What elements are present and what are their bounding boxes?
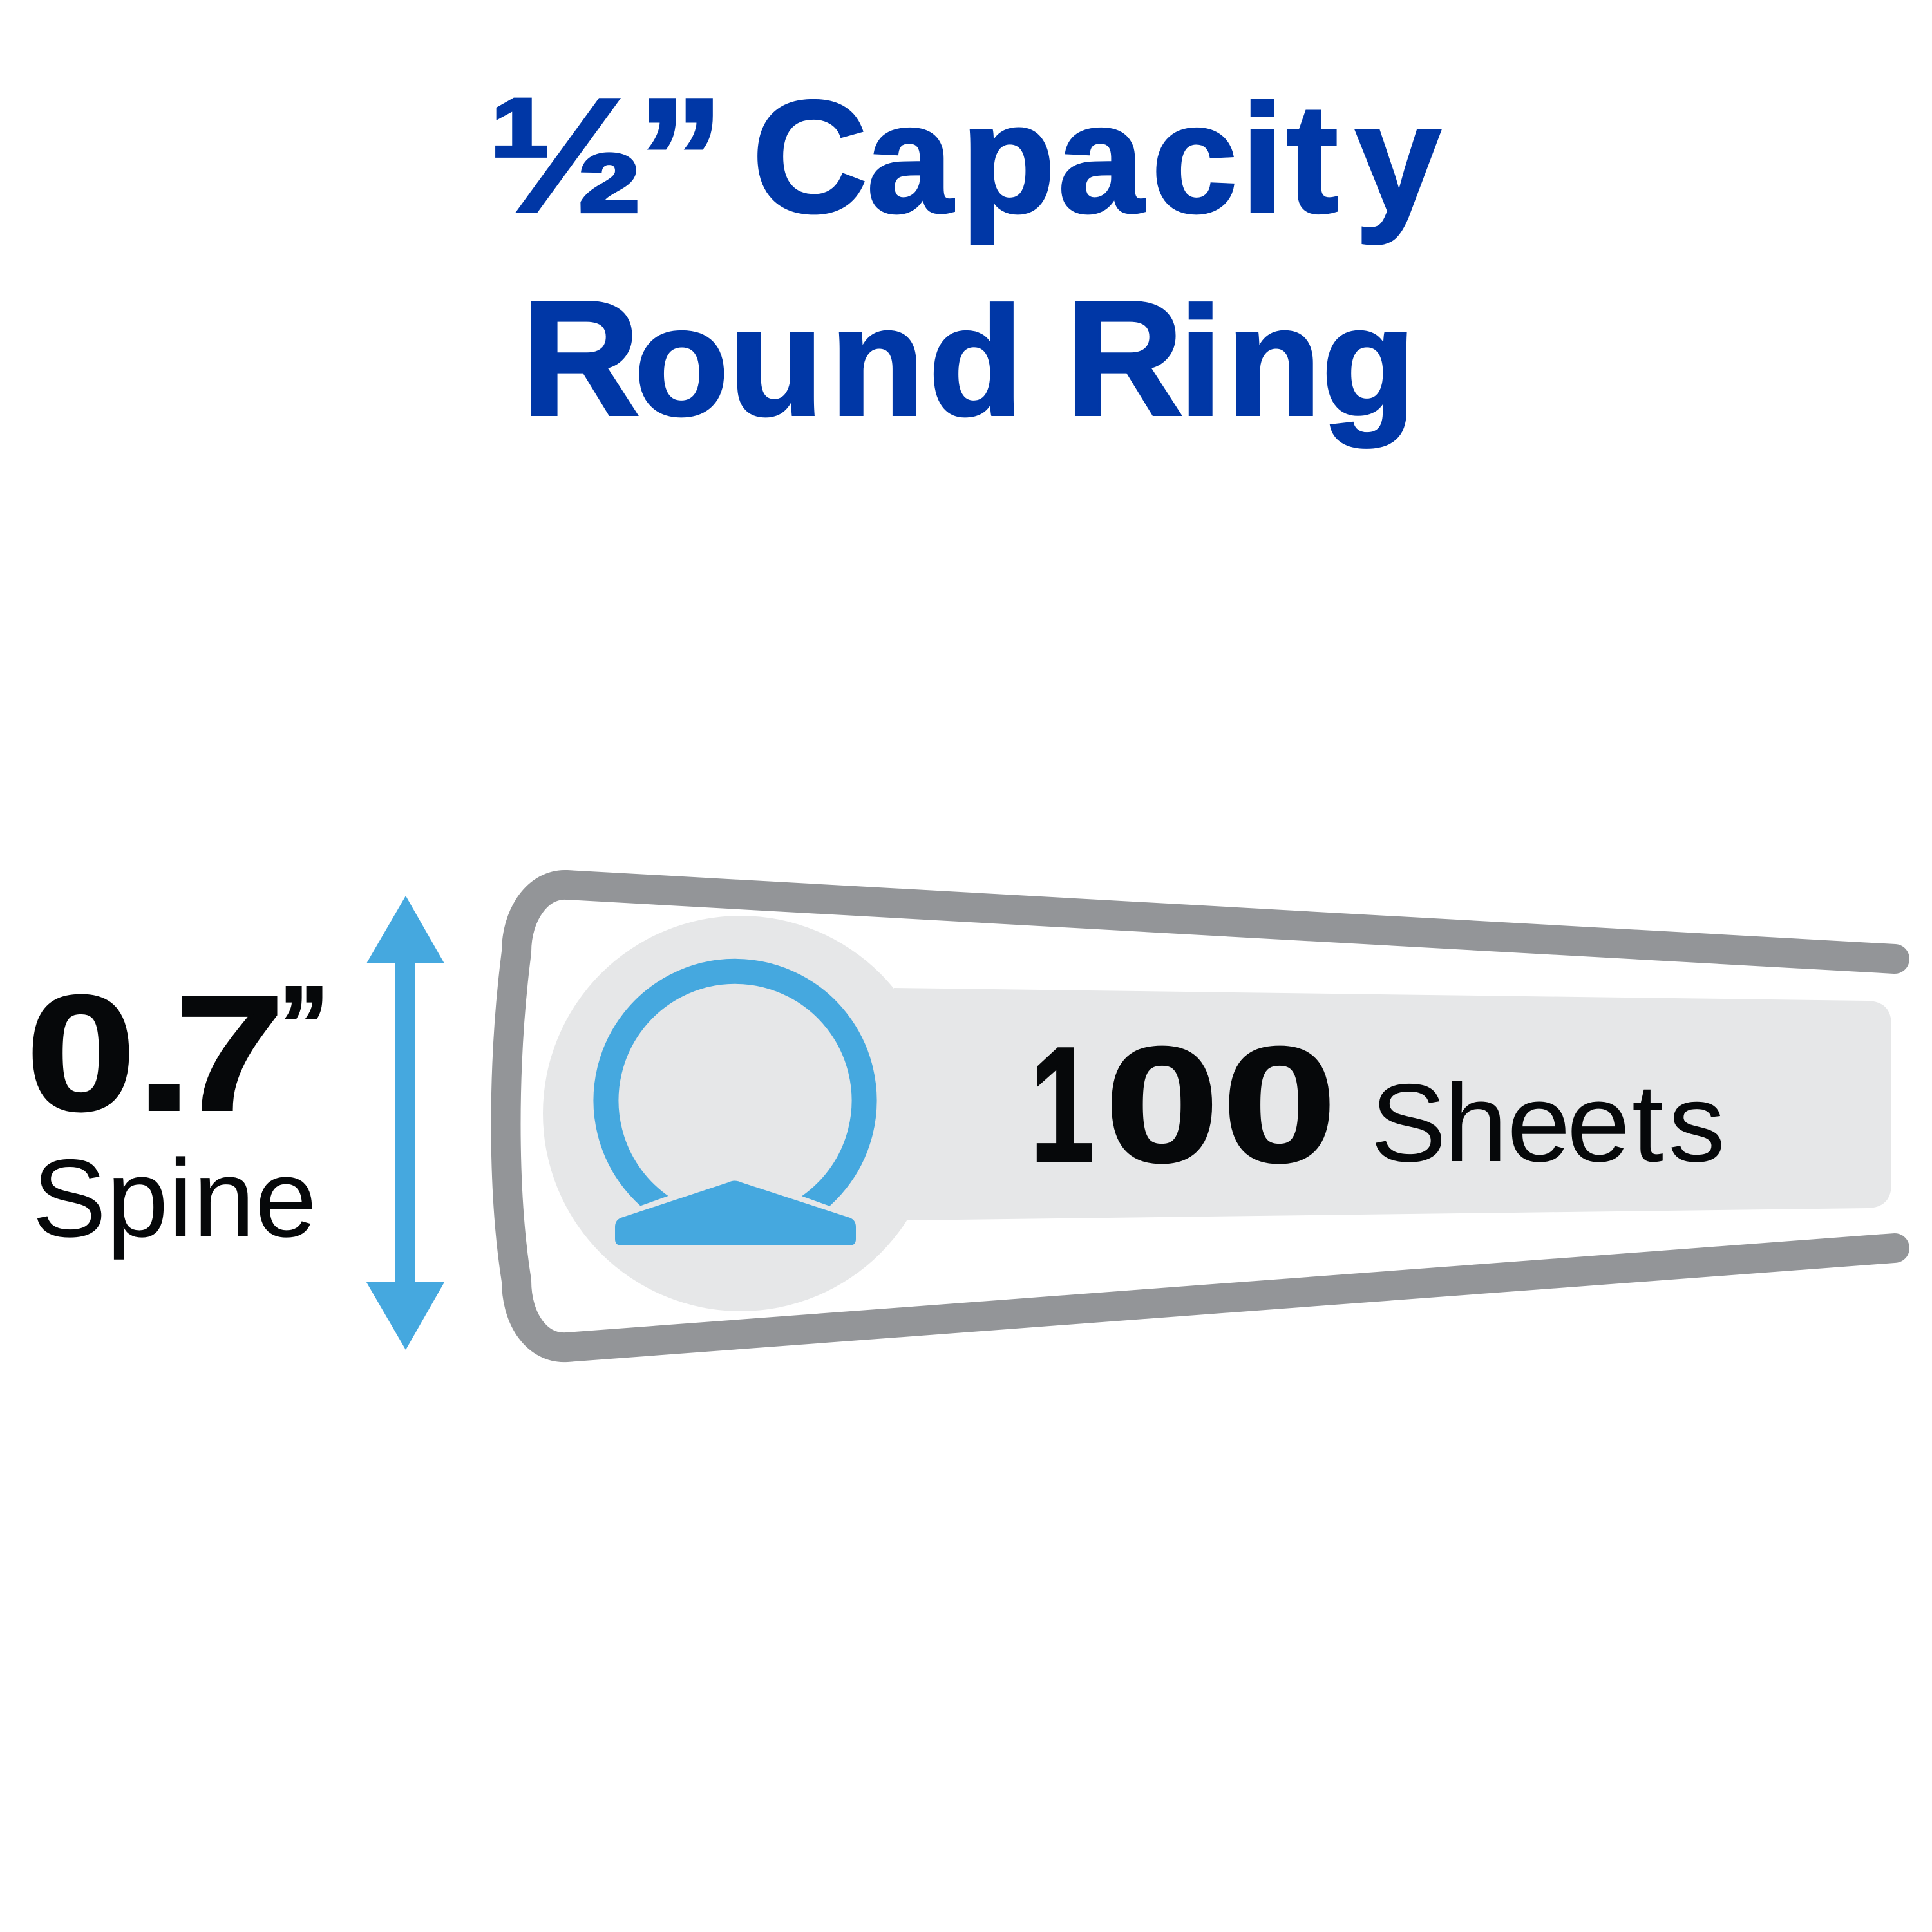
ring backdrop circle [543,916,938,1311]
sheet stack band [894,988,1891,1220]
title line 2: round ring: Round [522,267,1023,450]
sheet count caption: Sheets [1370,1061,1725,1184]
arrow: spine height [366,896,444,1350]
sheet count value: 1 [1030,1013,1094,1196]
title line 2: round ring: Ring [1065,267,1416,450]
sheet count value: 00 [1105,1013,1336,1196]
panel: sheet capacity [543,916,1891,1311]
title line 1: capacity [488,62,1441,256]
title line 2: round ring [522,267,1416,450]
spine value: 0.7 [26,962,285,1144]
icon: round ring [605,971,864,1249]
title [488,62,1441,450]
binder outline [506,885,1895,1347]
title line 1: capacity: Capacity [752,67,1441,246]
spine measurement label [26,962,328,1260]
title line 1: capacity: ” [637,62,724,256]
spine value: ” [279,964,328,1086]
spine caption: Spine [32,1137,317,1260]
title line 1: capacity: ½ [488,64,645,247]
